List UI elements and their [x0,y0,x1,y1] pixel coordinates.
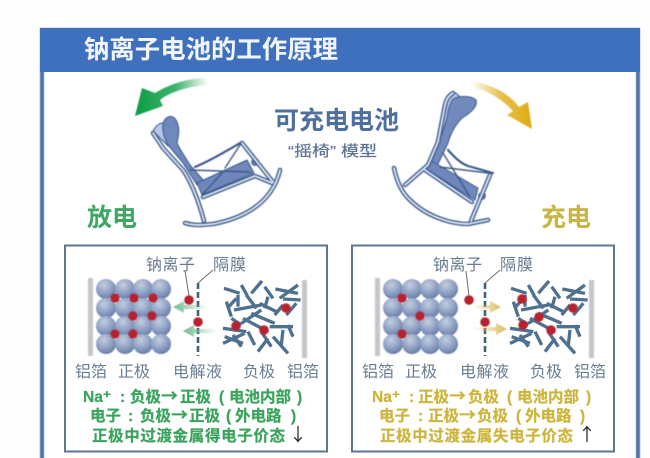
cathode sodium ions [397,293,425,339]
charge notes: ↑ [578,421,596,447]
discharge notes: ( [226,408,232,425]
labels [75,256,319,381]
charge notes: 正极 [428,407,460,425]
icon: right rocking chair [394,93,493,224]
charge notes: ) [580,408,585,425]
charge notes: 电池内部 [517,387,580,406]
anode carbon sticks [510,281,588,353]
discharge notes: 负极 [140,407,172,425]
icon: green discharge arrow [135,78,208,116]
icon: yellow charge arrow [471,81,532,129]
label: discharge: 放电 [87,204,137,232]
charge notes: 外电路 [525,406,572,425]
discharge notes: 正极中过渡金属得电子价态 [92,426,285,445]
labels [362,256,606,381]
labels: 铝箔 [287,363,319,381]
labels: 钠离子 [146,256,195,274]
labels: 铝箔 [75,363,107,381]
anode carbon sticks [223,281,301,353]
discharge notes [83,382,307,447]
charge notes: 电子 [379,407,410,425]
cathode sodium ions [110,293,158,339]
labels: 正极 [118,363,150,381]
discharge notes: → [161,382,178,407]
charge notes: → [449,382,466,407]
labels: 电解液 [460,363,509,381]
yellow ion arrows [473,301,507,335]
panel: charge [352,246,614,452]
anode sodium ions [231,303,291,335]
discharge notes: 电池内部 [229,387,292,406]
discharge notes: ) [297,389,302,406]
icon: left rocking chair [153,117,280,225]
charge notes: : [409,389,414,406]
separator [484,283,486,356]
labels: 正极 [405,363,437,381]
leader lines [466,270,500,296]
green ion arrows [173,301,217,337]
discharge notes: : [128,408,133,425]
discharge notes: 负极 [130,388,162,406]
labels: 钠离子 [433,256,482,274]
aluminium foil collectors [375,278,594,358]
free sodium ions [184,295,203,327]
free sodium ions [464,295,490,327]
panel: discharge [65,246,327,452]
heading: rechargeable battery: 可充电电池 [274,107,399,135]
charge notes: : [418,408,423,425]
charge notes: Na⁺ [372,389,400,406]
labels: 负极 [530,363,562,381]
discharge notes: ↓ [289,421,307,447]
discharge notes: 正极 [189,407,221,425]
charge notes: ( [507,389,513,406]
leader lines [185,270,213,296]
labels: 负极 [243,363,275,381]
discharge notes: → [171,401,188,426]
charge notes: 负极 [468,388,500,406]
separator [197,283,199,356]
labels: 铝箔 [574,363,606,381]
charge notes: ) [586,389,591,406]
charge notes: → [459,401,476,426]
charge notes: 正极中过渡金属失电子价态 [380,426,573,445]
cathode lattice [383,279,458,354]
discharge notes: : [120,389,125,406]
labels: 铝箔 [362,363,394,381]
discharge notes: ) [291,408,296,425]
anode sodium ions [517,294,578,335]
charge notes: ( [516,408,522,425]
discharge notes: 电子 [90,407,121,425]
label: charge: 充电 [541,204,591,232]
subheading: rocking chair model: “摇椅” 模型 [288,143,377,160]
labels: 隔膜 [213,256,246,274]
charge notes [372,382,596,447]
discharge notes: 外电路 [235,406,282,425]
charge notes: 正极 [418,388,450,406]
charge notes: 负极 [477,407,509,425]
discharge notes: Na⁺ [83,389,111,406]
cathode lattice [96,279,171,354]
labels: 电解液 [173,363,222,381]
aluminium foil collectors [88,278,307,358]
labels: 隔膜 [500,256,533,274]
discharge notes: 正极 [180,388,212,406]
discharge notes: ( [219,389,225,406]
title banner [40,28,640,72]
title banner: 钠离子电池的工作原理 [84,36,338,64]
